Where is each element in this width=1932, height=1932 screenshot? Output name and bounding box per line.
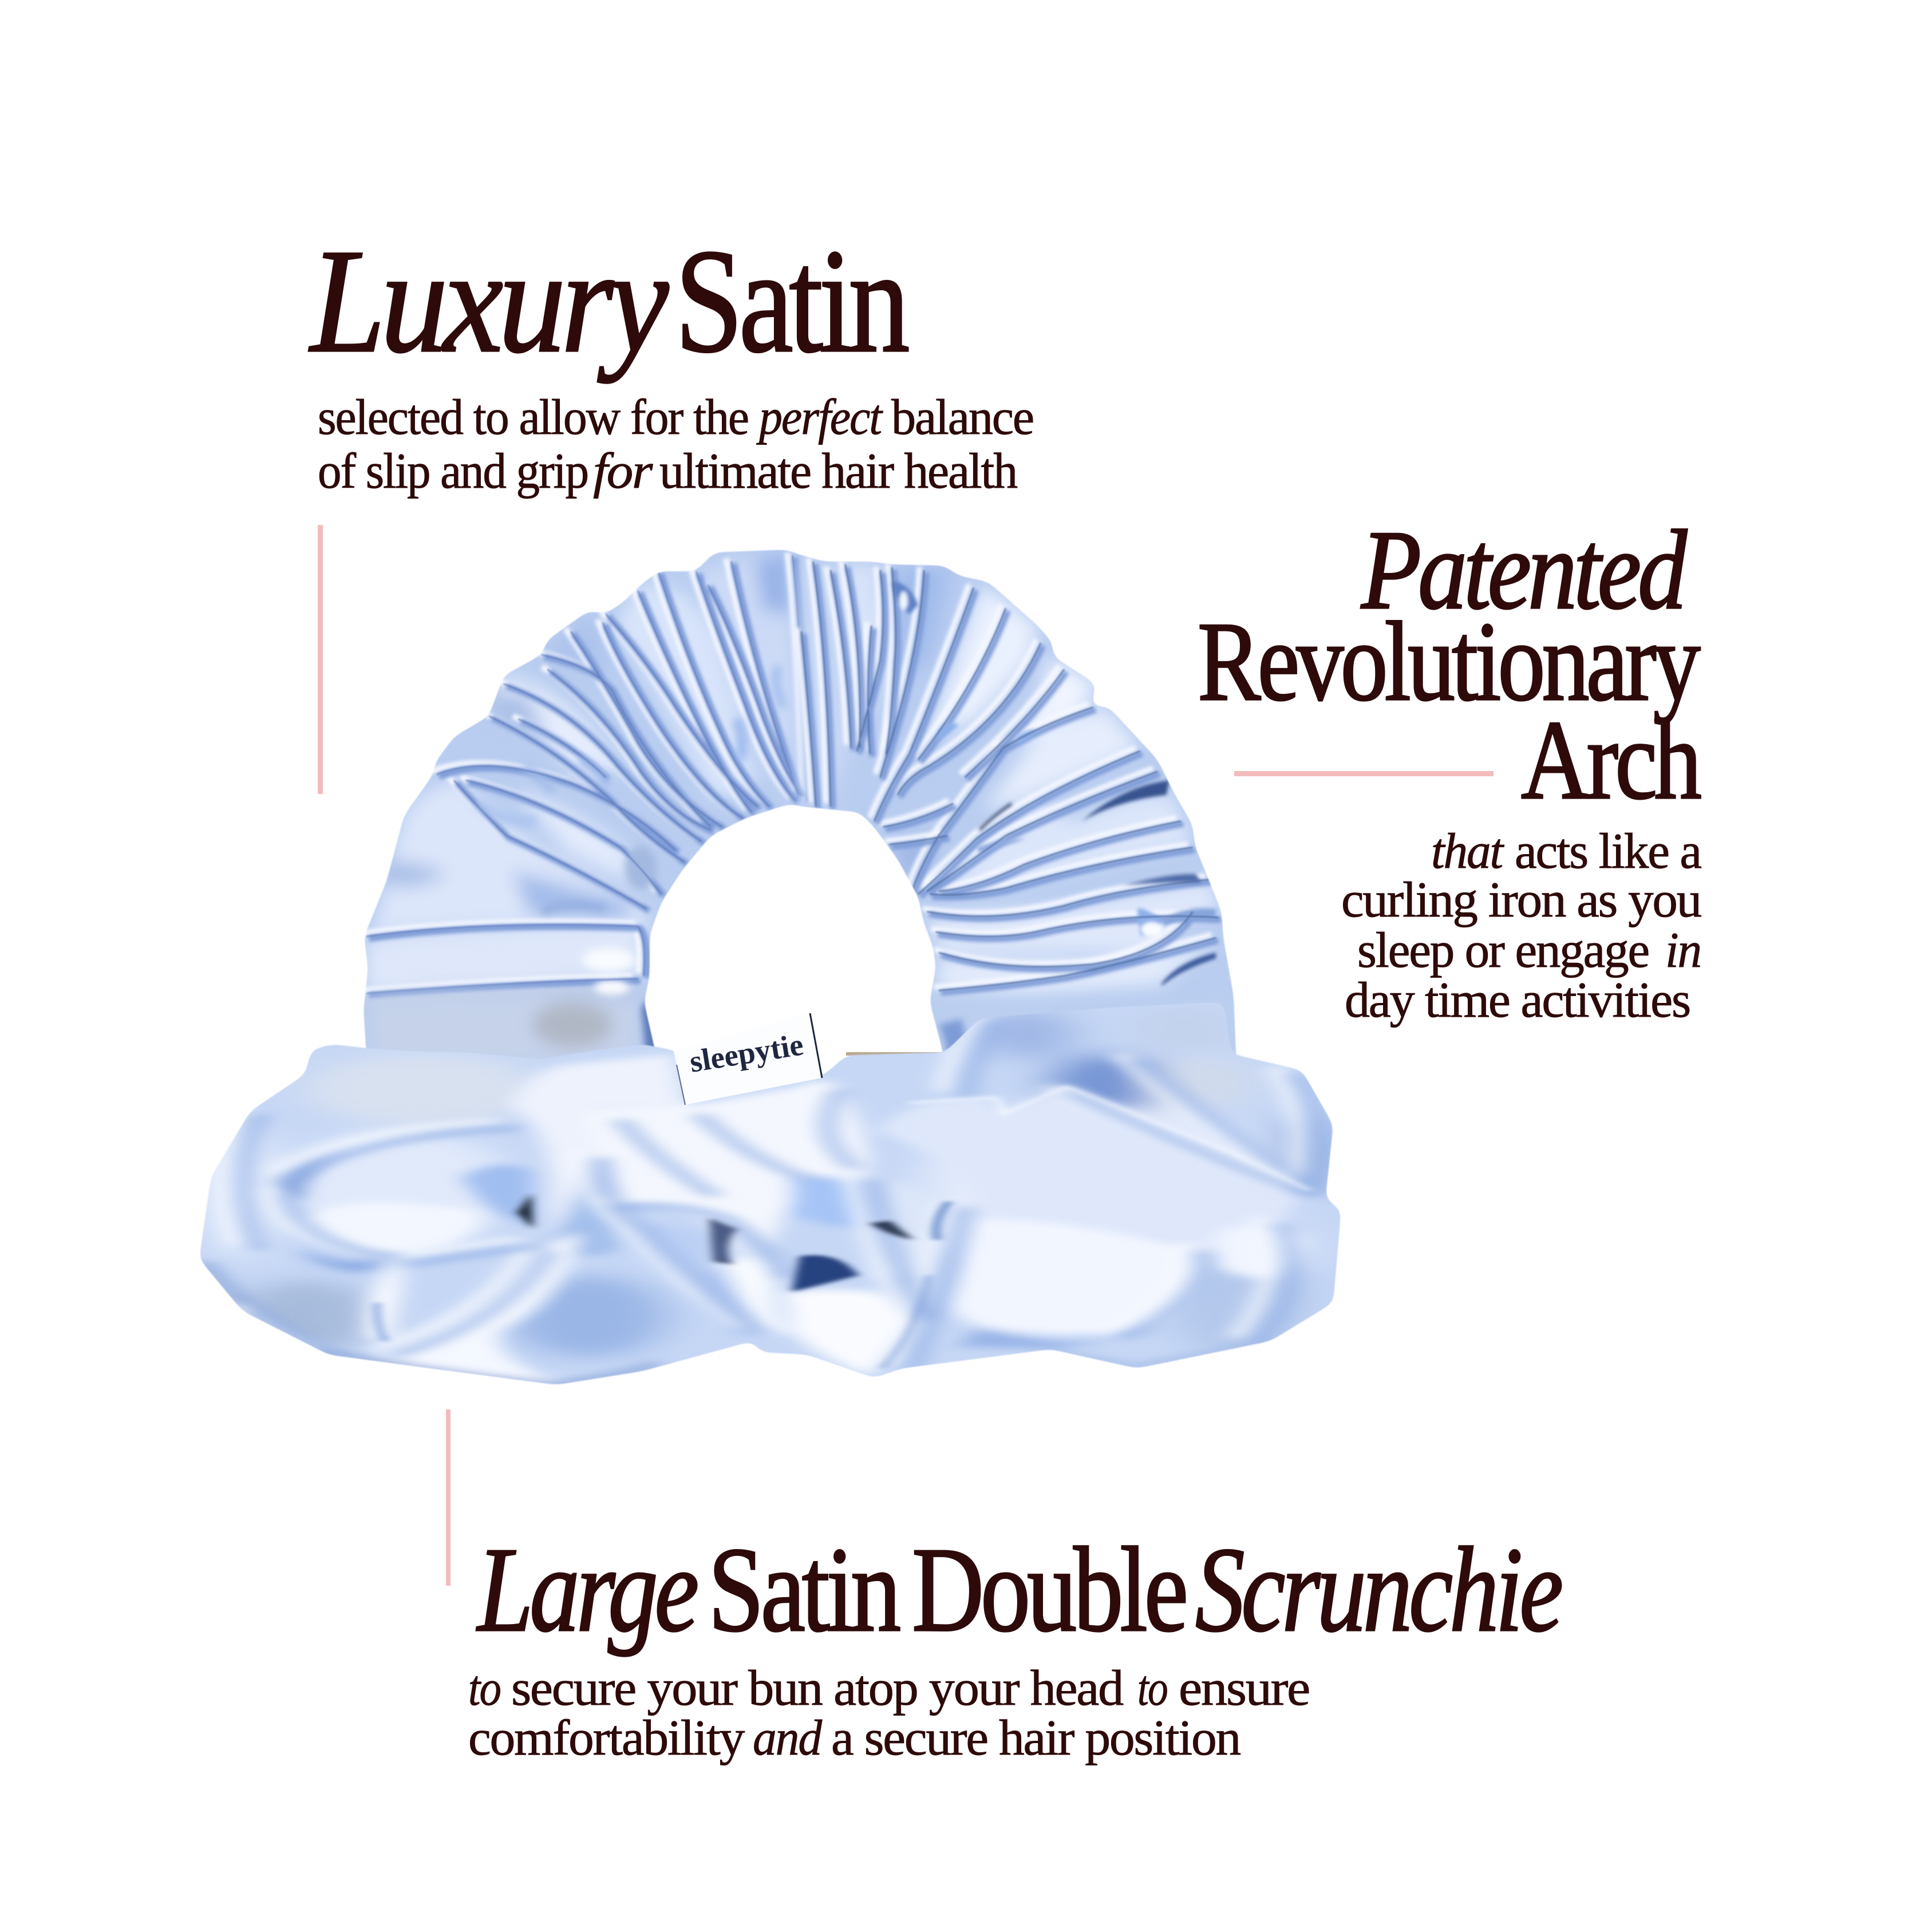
- satin ridge shadows: [804, 564, 1221, 993]
- body text: scrunchie description: and: [753, 1710, 823, 1766]
- body text: scrunchie description: secure your bun atop your head: [511, 1661, 1123, 1716]
- heading block: Large Satin Double Scrunchie: [468, 1522, 1562, 1766]
- title: Patented Revolutionary Arch: [1198, 507, 1701, 823]
- body text: scrunchie description: comfortability: [468, 1710, 745, 1766]
- title: Luxury Satin: Luxury: [308, 219, 670, 384]
- title: Patented Revolutionary Arch: Patented: [1360, 507, 1688, 633]
- body text: arch description: acts like a: [1515, 824, 1701, 879]
- right lobe and petals: [203, 1054, 1310, 1385]
- title: Large Satin Double Scrunchie: Scrunchie: [1195, 1522, 1562, 1657]
- body text: scrunchie description: a secure hair position: [831, 1710, 1240, 1766]
- satin ridge highlights: [361, 552, 802, 990]
- title: Patented Revolutionary Arch: Revolutionary: [1198, 599, 1701, 724]
- arch base sections: [369, 994, 1236, 1065]
- arch right half folds: [797, 558, 1221, 993]
- body text: luxury satin description: perfect: [756, 390, 883, 445]
- body text: luxury satin description: balance: [891, 390, 1033, 445]
- sewn brand tag: [674, 1013, 822, 1105]
- callout line: arch: [1234, 771, 1494, 776]
- title: Large Satin Double Scrunchie: Large: [476, 1522, 697, 1657]
- satin arch: [363, 550, 1236, 1059]
- tag text: sleepytie: [687, 1027, 805, 1079]
- body text: scrunchie description: to: [1137, 1661, 1167, 1716]
- dark creases and gaps: [377, 1086, 1310, 1369]
- body text: arch description: sleep or engage: [1357, 923, 1649, 978]
- scrunchie fold shadows: [244, 1021, 1320, 1371]
- body text: arch description: day time activities: [1345, 973, 1690, 1028]
- tan inner band: [846, 1052, 949, 1056]
- title: Luxury Satin: Satin: [675, 219, 910, 384]
- product illustration: satin arch scrunchie: [189, 532, 1351, 1397]
- body text: scrunchie description: [468, 1661, 1309, 1766]
- title: Luxury Satin: [308, 219, 910, 384]
- body text: luxury satin description: of slip and grip: [318, 444, 588, 499]
- satin ridge shadows: [369, 558, 810, 995]
- heading block: Patented Revolutionary Arch: [1198, 507, 1701, 1028]
- title: Large Satin Double Scrunchie: [476, 1522, 1562, 1657]
- body text: arch description: that: [1431, 824, 1505, 879]
- arch left half folds: [361, 551, 810, 1011]
- body text: luxury satin description: ultimate hair health: [659, 444, 1017, 499]
- body text: arch description: curling iron as you: [1341, 872, 1701, 928]
- body text: luxury satin description: for: [593, 444, 653, 499]
- large tonal areas: [211, 1008, 1327, 1357]
- satin ridge highlights: [797, 558, 1214, 987]
- title: Large Satin Double Scrunchie: Satin: [708, 1522, 900, 1657]
- crease lines: [366, 555, 807, 993]
- callout line: satin: [318, 525, 323, 794]
- scrunchie fold highlights: [223, 1015, 1299, 1365]
- heading block: Luxury Satin: [308, 219, 1033, 499]
- body text: luxury satin description: selected to allow for the: [318, 390, 748, 445]
- body text: scrunchie description: ensure: [1179, 1661, 1309, 1716]
- double scrunchie: [189, 996, 1351, 1397]
- crease lines: [801, 562, 1219, 990]
- body text: arch description: in: [1665, 923, 1701, 978]
- body text: scrunchie description: to: [468, 1661, 500, 1716]
- title: Patented Revolutionary Arch: Arch: [1521, 697, 1701, 823]
- body text: luxury satin description: [318, 390, 1033, 499]
- body text: arch description: [1341, 824, 1701, 1028]
- callout line: scrunchie: [446, 1409, 451, 1586]
- infographic canvas: [200, 251, 1701, 1765]
- title: Large Satin Double Scrunchie: Double: [912, 1522, 1185, 1657]
